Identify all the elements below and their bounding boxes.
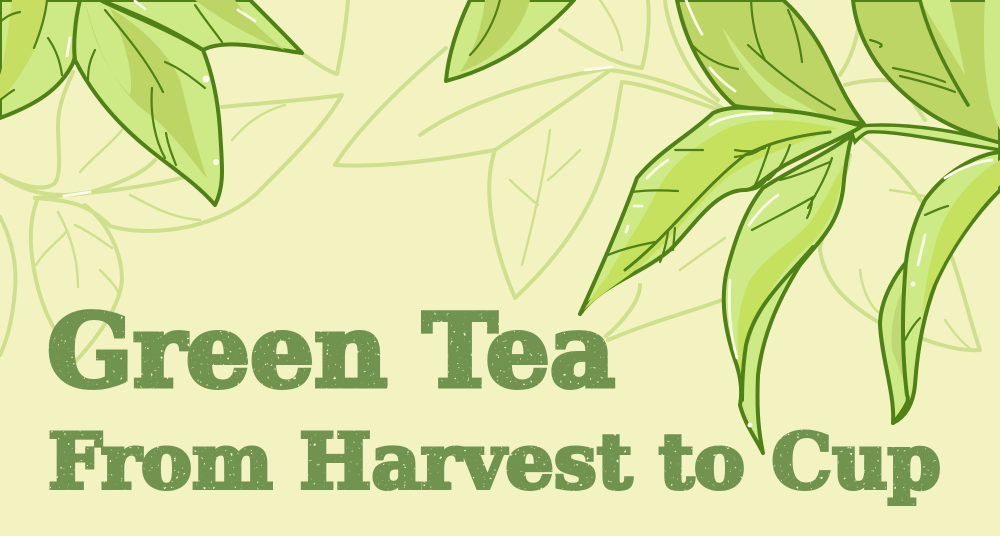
background leaf outlines: right cluster (820, 30, 980, 350)
top-right leaf: far right (853, 0, 1000, 143)
title (47, 292, 941, 506)
heading: Green Tea: Green Tea (47, 292, 615, 410)
top-right leaf: upper-middle (677, 0, 864, 124)
top-centre tea leaf (446, 0, 574, 81)
leaf: centre (74, 0, 222, 205)
right tea leaf (880, 152, 1000, 423)
background leaf outlines: left cluster (0, 0, 348, 362)
leaf: top right (100, 0, 302, 53)
subheading: From Harvest to Cup: From Harvest to Cup (48, 417, 941, 506)
leaf: far left (0, 0, 80, 118)
centre drooping tea leaf (724, 135, 852, 453)
background leaf outlines: centre cluster (335, 0, 725, 340)
top-left tea leaves (0, 0, 302, 205)
tea branch stem (850, 125, 1000, 150)
large left-pointing tea leaf (580, 108, 862, 314)
